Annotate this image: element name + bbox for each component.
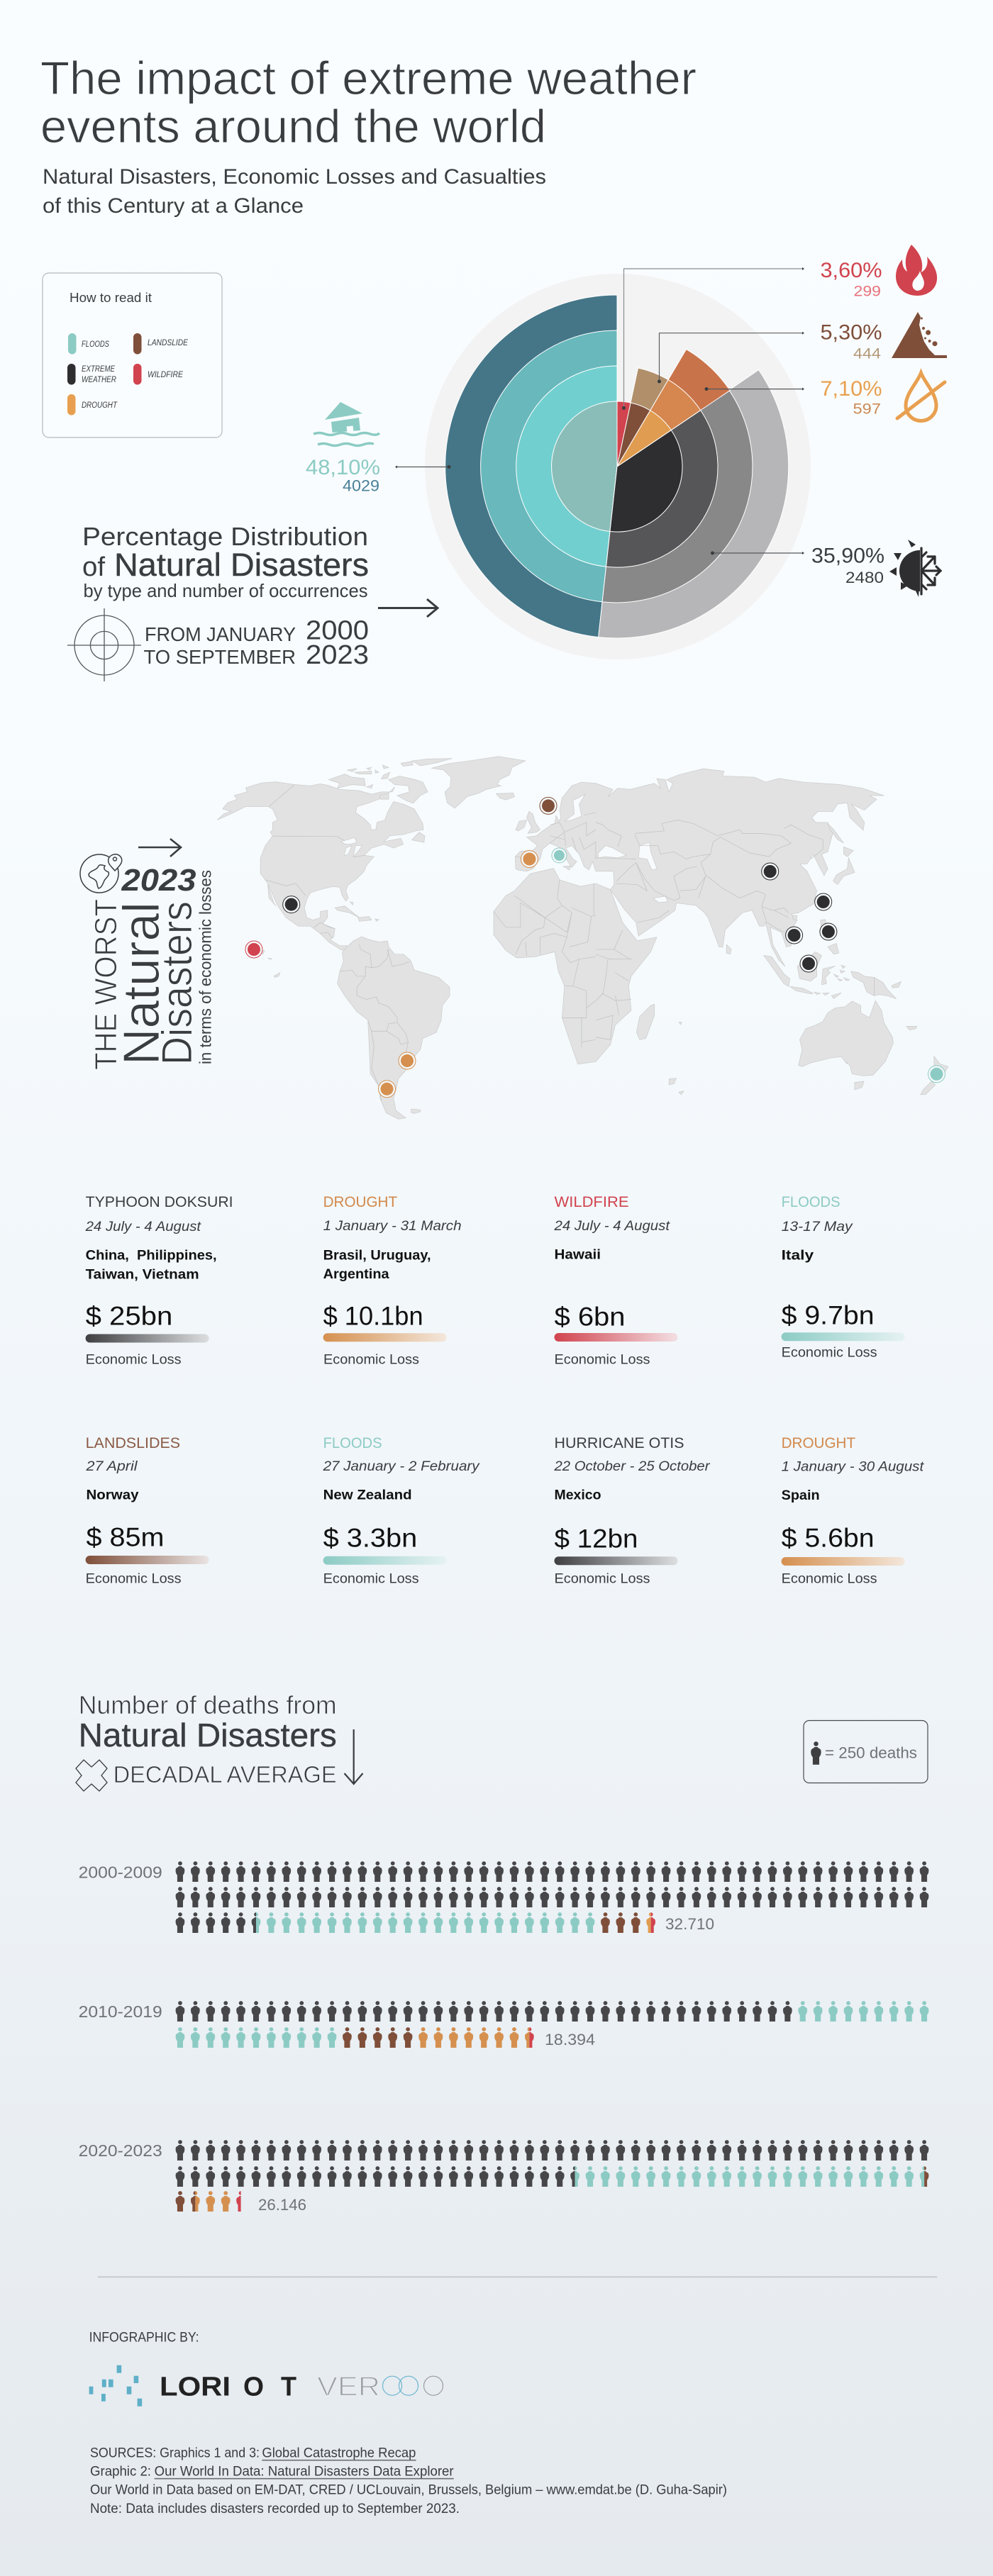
logo: loriot: O — [243, 2372, 264, 2402]
arrow: down — [345, 1729, 363, 1784]
card: landslides norway — [85, 1435, 209, 1587]
card: hurricane otis: HURRICANE OTIS — [555, 1435, 684, 1451]
card: wildfire hawaii — [553, 1194, 678, 1368]
card: typhoon doksuri: China, Philippines, — [86, 1248, 217, 1264]
card: hurricane otis: Economic Loss — [555, 1571, 650, 1587]
label: drought: 7,10% — [820, 377, 882, 401]
label: drought: 597 — [853, 401, 881, 417]
card: drought brazil: DROUGHT — [323, 1194, 397, 1210]
card: floods new zealand: $ 3.3bn — [323, 1523, 417, 1553]
region: africa — [494, 869, 657, 1064]
card: hurricane otis: Mexico — [555, 1488, 601, 1502]
card: floods new zealand: 27 January - 2 February — [323, 1459, 480, 1474]
heading: number of deaths: DECADAL AVERAGE — [113, 1761, 337, 1788]
icon: sun and snowflake — [889, 540, 941, 597]
panel: how to read it legend: DROUGHT — [82, 401, 118, 410]
card: landslides norway: Economic Loss — [86, 1571, 182, 1587]
label: landslide — [820, 312, 947, 362]
heading: percentage distribution: 2023 — [306, 640, 369, 670]
gradient bar — [555, 1333, 678, 1342]
card: wildfire hawaii: $ 6bn — [555, 1303, 626, 1332]
marker: landslide norway — [540, 797, 557, 814]
arrow: pointing to chart — [378, 599, 438, 617]
heading: number of deaths — [79, 1690, 337, 1788]
card: floods new zealand: Economic Loss — [323, 1571, 419, 1587]
card: wildfire hawaii: Economic Loss — [555, 1353, 650, 1368]
gradient bar — [323, 1333, 447, 1342]
card: floods italy: $ 9.7bn — [782, 1301, 875, 1330]
heading: worst natural disasters of 2023 — [89, 863, 214, 1070]
heading: percentage distribution: 2000 — [306, 615, 369, 645]
card: drought spain — [782, 1435, 924, 1587]
card: floods italy: FLOODS — [782, 1194, 841, 1210]
card: floods italy: 13-17 May — [782, 1220, 853, 1234]
gradient bar — [86, 1334, 209, 1343]
sources — [90, 2446, 727, 2516]
markers: typhoon doksuri — [762, 863, 837, 972]
arrow: pointing to map — [138, 839, 181, 857]
subtitle: of this Century at a Glance — [43, 194, 304, 218]
marker: drought spain — [521, 851, 538, 868]
world map — [217, 757, 948, 1119]
card: drought brazil: Argentina — [323, 1267, 389, 1282]
logo: loriot: LORI — [160, 2372, 231, 2402]
panel: how to read it legend: How to read it — [70, 291, 152, 305]
region: greenland and arctic islands — [431, 757, 526, 808]
card: floods italy: Italy — [782, 1248, 814, 1264]
card: landslides norway: Norway — [87, 1488, 139, 1502]
heading: percentage distribution: by type and number of occurrences — [84, 580, 367, 601]
heading: worst natural disasters of 2023: Natural — [113, 902, 170, 1065]
sources: Note: Data includes disasters recorded up to September 2023. — [90, 2501, 460, 2516]
card: hurricane otis: $ 12bn — [555, 1524, 638, 1553]
sources: Global Catastrophe Recap — [262, 2446, 416, 2461]
card: drought spain: Economic Loss — [782, 1571, 877, 1587]
card: floods italy: Economic Loss — [782, 1345, 877, 1360]
card: floods new zealand — [323, 1435, 480, 1587]
icon: flame — [896, 245, 937, 296]
card: landslides norway: LANDSLIDES — [86, 1435, 180, 1451]
label: wildfire: 3,60% — [820, 259, 882, 282]
card: landslides norway: 27 April — [85, 1459, 138, 1474]
logo: loriot — [89, 2365, 296, 2407]
pictogram row: 2000-2009: 2000-2009 — [79, 1863, 162, 1882]
card: wildfire hawaii: 24 July - 4 August — [553, 1219, 670, 1234]
pictogram row: 2020-2023: 26.146 — [258, 2196, 306, 2214]
panel: how to read it legend: WILDFIRE — [148, 371, 183, 379]
segment: extreme weather — [599, 370, 789, 638]
pictogram row: 2010-2019: 18.394 — [545, 2031, 595, 2048]
card: typhoon doksuri: Taiwan, Vietnam — [86, 1267, 199, 1282]
gradient bar — [86, 1556, 209, 1564]
label: drought — [820, 373, 945, 421]
sources: Our World In Data: Natural Disasters Data Explorer — [155, 2464, 454, 2480]
label: floods: 48,10% — [306, 456, 380, 479]
region: north america — [217, 782, 423, 950]
icon: landslide — [892, 312, 947, 358]
card: typhoon doksuri — [85, 1194, 233, 1368]
pictogram row: 2020-2023: 2020-2023 — [79, 2141, 162, 2160]
panel: how to read it legend: LANDSLIDE — [148, 339, 188, 347]
panel: key 250 deaths: = 250 deaths — [825, 1744, 917, 1761]
card: landslides norway: $ 85m — [87, 1523, 165, 1552]
region: australia and oceania — [799, 1000, 893, 1076]
region: eurasia — [515, 769, 884, 966]
label: extreme weather: 2480 — [845, 569, 884, 586]
heading: percentage distribution: of — [82, 552, 105, 582]
heading: worst natural disasters of 2023: 2023 — [121, 863, 196, 898]
heading: worst natural disasters of 2023: in terms of economic losses — [196, 870, 214, 1064]
marker: hurricane otis mexico — [283, 896, 300, 913]
credit heading: INFOGRAPHIC BY: — [89, 2331, 199, 2346]
sources: SOURCES: Graphics 1 and 3: — [90, 2446, 260, 2461]
title — [40, 52, 697, 152]
pictogram row: 2010-2019 — [79, 2001, 928, 2048]
gradient bar — [782, 1557, 905, 1566]
card: wildfire hawaii: Hawaii — [555, 1248, 601, 1263]
card: drought brazil: Brasil, Uruguay, — [323, 1248, 431, 1264]
subtitle — [43, 165, 546, 218]
card: hurricane otis — [553, 1435, 710, 1587]
pictogram row: 2000-2009: 32.710 — [665, 1915, 714, 1933]
logo: loriot: T — [281, 2372, 296, 2402]
panel: how to read it legend — [43, 273, 222, 437]
icon: crossed water drop — [897, 373, 945, 421]
marker: wildfire hawaii — [245, 941, 262, 958]
card: floods new zealand: New Zealand — [323, 1488, 412, 1502]
card: typhoon doksuri: TYPHOON DOKSURI — [86, 1194, 233, 1210]
label: wildfire — [820, 245, 937, 299]
card: drought spain: $ 5.6bn — [782, 1523, 875, 1553]
panel: how to read it legend: WEATHER — [82, 376, 116, 384]
map markers — [245, 797, 945, 1098]
panel: how to read it legend: EXTREME — [82, 365, 115, 374]
heading: worst natural disasters of 2023: Disasters — [153, 901, 201, 1065]
label: floods — [306, 402, 380, 495]
chart: radial distribution of disasters — [425, 274, 811, 659]
title: The impact of extreme weather — [40, 52, 697, 104]
icon: flooded house — [314, 402, 379, 445]
title: events around the world — [40, 100, 546, 152]
heading: number of deaths: Number of deaths from — [79, 1690, 337, 1719]
segment: landslide — [617, 368, 668, 467]
subtitle: Natural Disasters, Economic Losses and Casualties — [43, 165, 546, 189]
segment: drought — [617, 350, 730, 467]
gradient bar — [555, 1556, 678, 1565]
card: drought brazil — [323, 1194, 462, 1368]
leader lines — [395, 267, 804, 554]
markers: drought south america — [379, 1052, 416, 1098]
card: hurricane otis: 22 October - 25 October — [553, 1459, 710, 1474]
segment: floods — [445, 295, 617, 637]
card: drought brazil: 1 January - 31 March — [323, 1219, 462, 1234]
icon: cross — [76, 1760, 107, 1791]
segment: wildfire — [617, 401, 631, 467]
card: floods italy — [782, 1194, 905, 1360]
heading: worst natural disasters of 2023: THE WORST — [89, 899, 123, 1070]
sources: Our World in Data based on EM-DAT, CRED / UCLouvain, Brussels, Belgium – www.emdat.be (D. Guha-Sapir) — [90, 2482, 727, 2498]
card: typhoon doksuri: 24 July - 4 August — [85, 1220, 201, 1234]
heading: percentage distribution: Natural Disasters — [114, 547, 369, 583]
card: drought spain: DROUGHT — [782, 1435, 855, 1451]
region: south america — [338, 937, 450, 1119]
region: asian islands — [526, 811, 540, 833]
marker: floods italy — [552, 848, 567, 863]
pictogram row: 2000-2009 — [79, 1861, 928, 1933]
heading: percentage distribution — [82, 522, 369, 670]
label: extreme weather: 35,90% — [811, 545, 884, 567]
heading: number of deaths: Natural Disasters — [79, 1717, 337, 1753]
heading: percentage distribution: Percentage Distribution — [82, 522, 368, 551]
label: landslide: 5,30% — [820, 320, 882, 345]
icon: target — [67, 608, 141, 681]
heading: percentage distribution: FROM JANUARY — [145, 623, 296, 645]
pictogram row: 2020-2023 — [79, 2140, 928, 2214]
label: extreme weather — [811, 540, 941, 597]
label: floods: 4029 — [343, 476, 379, 495]
heading: percentage distribution: TO SEPTEMBER — [143, 646, 296, 668]
pictogram row: 2010-2019: 2010-2019 — [79, 2002, 162, 2021]
card: drought brazil: $ 10.1bn — [323, 1302, 423, 1330]
card: wildfire hawaii: WILDFIRE — [555, 1194, 628, 1210]
marker: floods new zealand — [928, 1066, 945, 1083]
icon: globe with pin — [80, 854, 122, 893]
sources: Graphic 2: — [90, 2464, 151, 2480]
card: floods new zealand: FLOODS — [323, 1435, 382, 1451]
card: drought spain: 1 January - 30 August — [782, 1459, 924, 1475]
card: typhoon doksuri: $ 25bn — [86, 1302, 172, 1330]
gradient bar — [323, 1556, 447, 1565]
gradient bar — [782, 1332, 905, 1341]
card: drought spain: Spain — [782, 1488, 820, 1503]
label: landslide: 444 — [853, 346, 881, 362]
panel: how to read it legend: FLOODS — [82, 340, 109, 349]
logo: verso: VER — [317, 2372, 380, 2402]
label: wildfire: 299 — [854, 284, 881, 299]
card: typhoon doksuri: Economic Loss — [86, 1353, 182, 1368]
logo: verso — [317, 2372, 443, 2402]
card: drought brazil: Economic Loss — [323, 1353, 419, 1368]
panel: key 250 deaths — [804, 1720, 928, 1783]
